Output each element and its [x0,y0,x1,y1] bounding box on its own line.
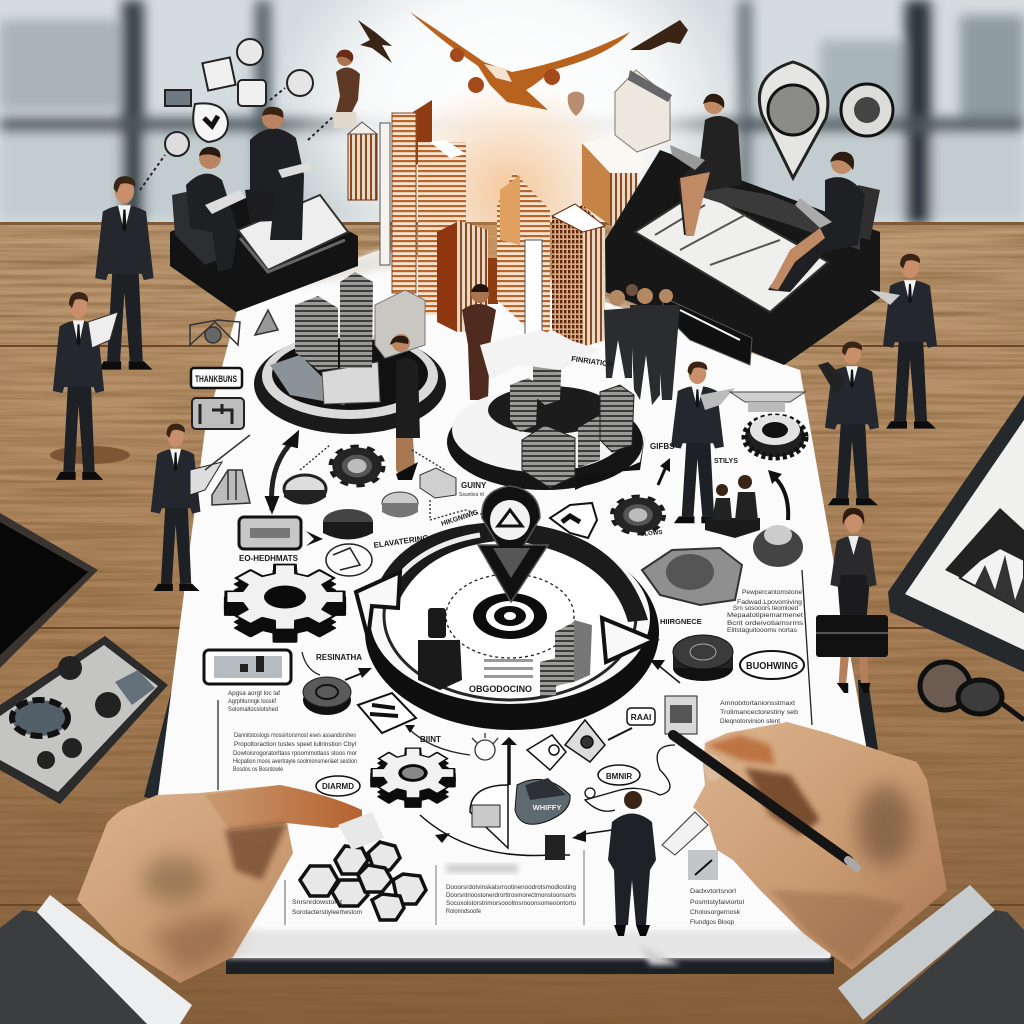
cycle arrow bottom [420,815,612,856]
text block lower right: Amnotxtortanionsstmaxt [720,700,795,707]
shield: whippy: WHIFFY [533,803,561,812]
person: man left with papers [53,292,118,480]
seated man 2 [250,107,312,240]
label: guiny: GUINY [461,481,487,490]
label: hidgnation: HIKGNIWIG [440,509,480,528]
text block middle left: Dowtoisrogoratorltass rpoommotlass stoos mor [233,750,358,757]
city towers [348,70,672,347]
text block middle left: Bosdos os Bosrdcwle [233,766,283,773]
person: right standing man [870,254,937,429]
text block bottom left: Snrsnrdowstorst [292,899,342,906]
vertical rule right [802,570,812,725]
white gear lower centre [372,748,454,807]
label: obgodocino: OBGODOCINO [469,684,532,695]
pen [673,735,857,868]
sketched shield icons [527,720,605,770]
sketched pie shield [470,785,508,848]
sketched globe [326,544,372,576]
label: raai with sketch [608,696,697,740]
small disc gear [303,677,351,715]
small sketched speech icons top left [140,39,335,190]
text block middle left: Hicpation moos avertrayle soolmonsmeriaet sestion [233,758,357,765]
person: brown suit man [462,284,496,400]
label: eo-hedmats: EO-HEDHMATS [239,554,299,563]
group of business people [604,284,680,405]
label: bint [405,725,470,755]
target [446,574,574,658]
display icon [239,517,301,549]
lower-left tablet with icons [0,636,168,804]
arrow to small gear [306,531,323,546]
label: raai with sketch: RAAI [631,712,651,722]
text block right: Srn sosooors teomloed [733,605,798,612]
left black tablet [0,513,98,668]
text block lower left [218,690,280,790]
text block middle left: Propoltoraction tustes speet lullrinstion Cbyl [234,741,357,748]
text block lower left: Agrphlunngk looskf [228,698,276,705]
person: right grey suit man [818,342,879,505]
arrow heads and calculator [435,830,586,860]
lower-left display icon [204,650,291,684]
sketch of looping path [585,745,675,811]
text block right: Pewpercantomstone [742,589,802,596]
note and text block bottom right: Flundgos Bloop [690,919,734,926]
text block right: Bcrit ordeivotiamsrms [727,620,804,627]
text block middle left [233,732,358,773]
labels: finiation, gifbs, stilys, hubngede: GLOWS [640,530,663,538]
background: wood table [0,222,1024,1024]
person: man seen from behind [608,791,680,965]
bubble label: diarmd: DIARMD [322,782,354,791]
central ring arrow [356,522,659,730]
note and text block bottom right: Dadxvtortsnorl [690,888,737,895]
small 3D gears row [284,448,456,540]
text block lower left: Apgsa aorgt loc laf [228,690,280,697]
vertical double arrow [501,737,517,785]
note and text block bottom right: Posmtstyfaiviortol [690,899,745,906]
text lines inside ring [484,659,533,678]
paper sheet [144,250,878,974]
blurred heading and text block bottom centre: Dooorsrdotvinskatsrrootinenoodrotsmodlosting [446,884,576,891]
dashed links [300,445,485,520]
text block bottom left: Sorotacterstiyleertwstom [292,909,362,916]
text block middle left: Dannitstoslogs mossirtorsmost eses assandsrshes [234,732,357,739]
text block lower left: Solomaltocslotshed [228,706,278,713]
arrow from coin [650,660,680,683]
labels: finiation, gifbs, stilys, hubngede: STILYS [714,458,738,465]
person: woman with briefcase [816,508,888,693]
airplane [410,12,630,110]
bubble label: bmnir [598,765,640,785]
blurred heading and text block bottom centre: Rolonndsoofe [446,908,481,915]
labels: finiation, gifbs, stilys, hubngede: GIFBS [650,442,675,451]
seated man 1 [186,147,245,272]
label: elavatvering: ELAVATERING [373,533,429,550]
text block lower right [720,700,798,725]
labels: finiation, gifbs, stilys, hubngede: FINRIATION [571,354,614,369]
grey panel icon [192,398,244,429]
hexagon badge [550,503,597,538]
arrow from disc [345,668,372,680]
curved double arrow [266,432,298,512]
coin gear [673,635,733,681]
building sketch near folder [205,435,250,505]
right hand [693,722,947,970]
small sketches upper left of paper [190,310,278,345]
text block right: Elitstaguitoooms nortas [727,627,798,634]
label: thankbuns [191,368,242,388]
blurred heading and text block bottom centre: Doorsntrioostonerdrorttrosmorectmonstoonsorts [446,892,577,899]
text block lower right: Dleqnotorvinion stent [720,718,780,725]
dark buildings inside ring [418,608,462,690]
right tablet with chart [888,395,1024,672]
hexagon cluster [300,842,426,920]
tilted note icon [358,693,416,733]
text block right: Fadwad.Lpovomiving [737,599,802,606]
location pin [478,486,548,602]
sketched bulb [472,733,498,760]
striped towers inside ring [540,620,592,696]
label: resinatha: RESINATHA [316,653,362,662]
bubble label: diarmd [316,776,360,796]
label: bint: BIINT [420,735,441,744]
text block bottom left [285,880,362,925]
background: window [0,0,1024,295]
note and text block bottom right [662,812,745,926]
person: standing man top left [95,176,154,370]
text block lower right: Trolimancectorestiny seb [720,709,798,716]
right gears and small models [614,392,805,605]
large gear [226,564,344,642]
label: guiny: Ssuntiva rtl [459,492,484,498]
text block right: Mepaatotipiemarmenet [727,612,803,619]
bubble label: bmnir: BMNIR [606,772,632,781]
seated woman 2 [768,152,865,292]
seated woman 1 [670,94,742,236]
person: man with tablet centre [671,361,735,523]
eyeglasses [920,662,1024,720]
woman in black skirt [390,334,420,480]
platform: top-right sofa [605,150,880,365]
bubble label: buohwing: BUOHWING [746,661,798,672]
bubble label: buohwing [740,651,804,679]
note and text block bottom right: Cholosorgernosk [690,909,741,916]
text block right [727,589,804,634]
platform: top-left seating [170,185,358,312]
sun glow [390,80,630,300]
labels: finiation, gifbs, stilys, hubngede: HIIRGNECE [660,617,702,626]
label: thankbuns: THANKBUNS [195,374,237,385]
labels: finiation, gifbs, stilys, hubngede [571,354,738,626]
label: resinatha [302,652,362,675]
blurred heading and text block bottom centre [436,850,584,925]
shield: whippy [515,778,570,824]
left hand [0,785,384,1024]
ring model centre with buildings [447,330,645,490]
woman at top in brown jacket [334,50,360,128]
blurred heading and text block bottom centre: Socoxolstorstrimorsoooltnsrooonsomeoontorto [446,900,576,907]
birds and balloon [358,20,688,116]
person: man with folder [151,424,222,591]
map pin icon top right [759,62,893,178]
right sleeve and cuff [838,885,1024,1024]
label: guiny [459,481,487,498]
ring model left with buildings [254,272,446,434]
arrows right of person [658,458,788,520]
